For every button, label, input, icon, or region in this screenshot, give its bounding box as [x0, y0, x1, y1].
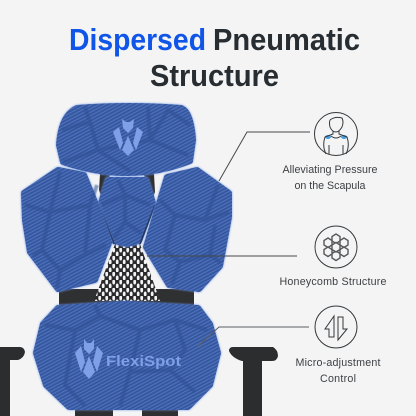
logo on seat: FlexiSpot	[106, 354, 181, 370]
callout line: scapula	[219, 132, 310, 181]
title	[69, 23, 360, 93]
headrest pad	[59, 106, 193, 173]
seat pad	[36, 304, 218, 407]
icon: micro-adjustment arrows	[315, 306, 357, 348]
icon: honeycomb	[315, 226, 357, 268]
callout line: honeycomb	[147, 255, 297, 257]
label: scapula: Alleviating Pressure	[282, 164, 378, 176]
callout line: micro-adjustment	[197, 327, 309, 347]
label: honeycomb: Honeycomb Structure	[280, 276, 387, 288]
label: scapula	[282, 164, 378, 192]
title: Dispersed	[69, 23, 206, 57]
title: Structure	[150, 59, 279, 93]
center back pad	[99, 180, 155, 244]
right armrest	[229, 347, 278, 416]
label: scapula: on the Scapula	[294, 180, 366, 192]
title: Pneumatic	[213, 23, 360, 57]
mesh back	[94, 244, 160, 301]
label: micro-adjustment: Control	[320, 373, 356, 385]
chair illustration	[0, 106, 278, 416]
logo on headrest	[113, 119, 143, 156]
chair frame	[59, 174, 194, 416]
left armrest	[0, 347, 25, 416]
label: micro-adjustment: Micro-adjustment	[296, 357, 381, 369]
label: micro-adjustment	[296, 357, 381, 385]
icon: person shoulders	[314, 112, 358, 156]
left wing pad	[24, 170, 109, 289]
logo on seat	[75, 339, 181, 379]
right wing pad	[146, 170, 229, 289]
